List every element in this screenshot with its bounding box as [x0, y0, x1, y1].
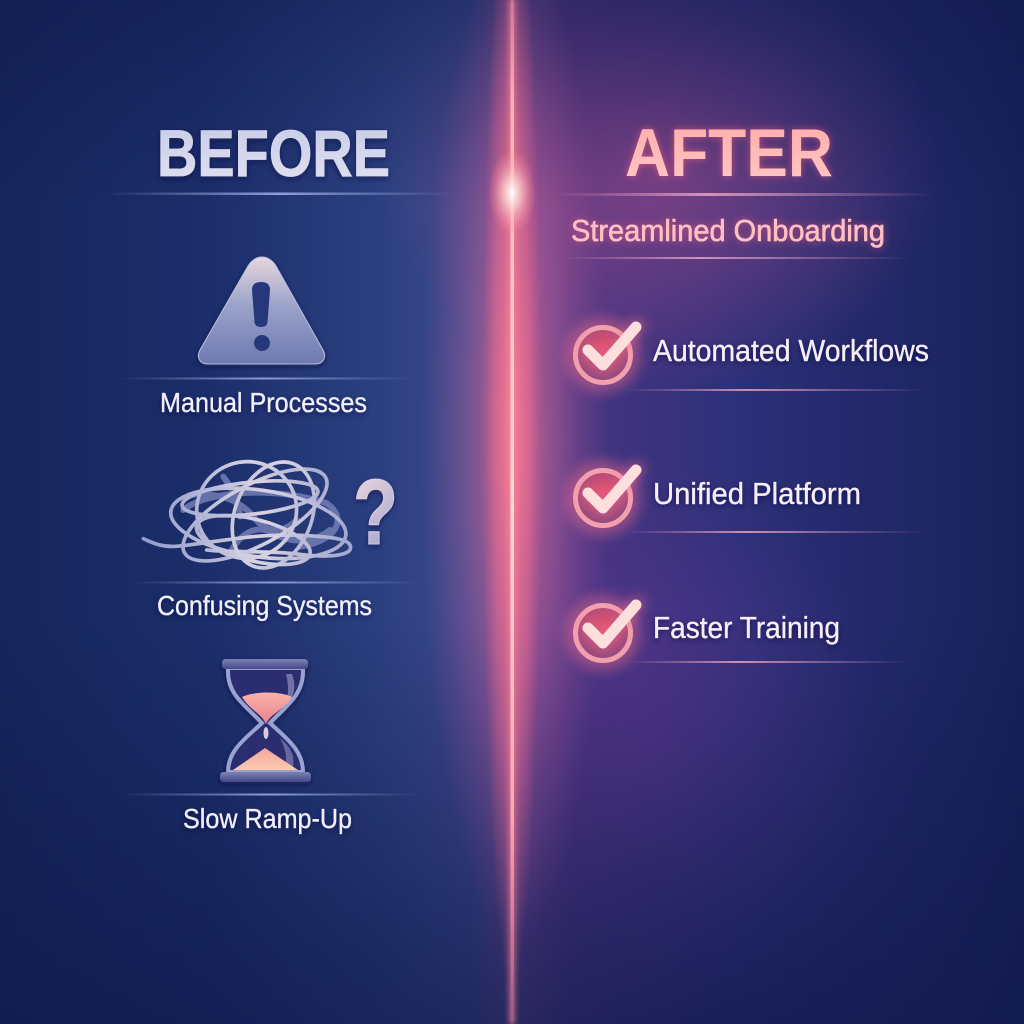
heading: after: AFTER	[625, 115, 833, 191]
heading underline	[555, 193, 935, 196]
item: faster training	[565, 595, 910, 671]
label: manual processes: Manual Processes	[160, 387, 367, 418]
label: unified platform: Unified Platform	[653, 476, 861, 511]
label: automated workflows: Automated Workflows	[653, 333, 929, 368]
divider	[625, 389, 925, 391]
divider	[625, 661, 910, 663]
heading underline	[105, 192, 455, 195]
icon: hourglass	[220, 659, 311, 782]
icon: check badge	[565, 595, 641, 671]
divider	[625, 531, 925, 533]
central glowing divider	[420, 0, 610, 1024]
subheading: streamlined onboarding: Streamlined Onboarding	[571, 213, 885, 248]
label: slow ramp-up: Slow Ramp-Up	[183, 803, 352, 834]
divider: manual processes	[120, 378, 410, 380]
divider: confusing systems	[130, 582, 420, 584]
icon: check badge	[565, 460, 641, 536]
icon: tangled wires	[143, 450, 351, 580]
icon: check badge	[565, 317, 641, 393]
divider: slow ramp-up	[120, 794, 420, 796]
icon: question mark: ?	[353, 460, 398, 564]
label: faster training: Faster Training	[653, 610, 840, 645]
item: automated workflows	[565, 317, 929, 393]
right column: after	[555, 115, 935, 671]
label: confusing systems: Confusing Systems	[157, 590, 372, 621]
item: unified platform	[565, 460, 925, 536]
icon: warning triangle	[198, 257, 325, 364]
subheading underline	[560, 257, 910, 259]
heading: before: BEFORE	[157, 116, 390, 190]
left column: before	[105, 116, 455, 834]
